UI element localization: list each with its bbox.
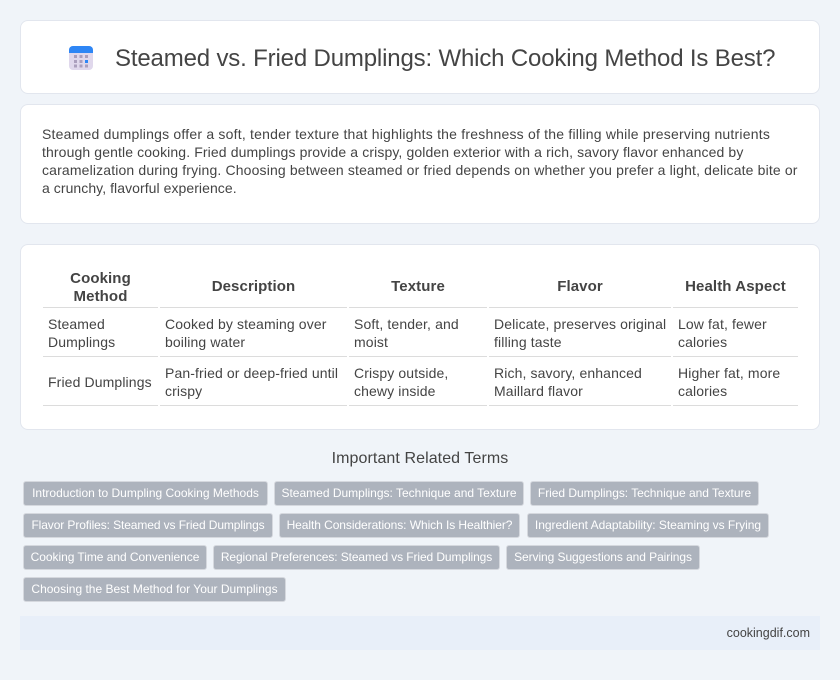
table row: steamed dumplings: Dumplings <box>48 334 115 350</box>
intro paragraph <box>42 126 798 196</box>
tag: Fried Dumplings: Technique and Texture <box>538 486 751 500</box>
tag: Steamed Dumplings: Technique and Texture <box>281 486 517 500</box>
table row: steamed dumplings: Delicate, preserves original <box>494 316 666 332</box>
icon: calendar grid <box>69 46 93 70</box>
table row: steamed dumplings: boiling water <box>165 334 245 350</box>
footer site name: cookingdif.com <box>727 626 810 640</box>
tag <box>274 481 524 506</box>
intro paragraph: Steamed dumplings offer a soft, tender texture that highlights the freshness of the filling while preserving nutrients <box>42 126 770 142</box>
table row: fried dumplings: Rich, savory, enhanced <box>494 365 642 381</box>
related terms heading: Important Related Terms <box>332 450 508 467</box>
table row: steamed dumplings: moist <box>354 334 388 350</box>
tag: Health Considerations: Which Is Healthier? <box>287 518 512 532</box>
table row: steamed dumplings: Cooked by steaming over <box>165 316 327 332</box>
table header: Description <box>212 278 295 295</box>
tag: Introduction to Dumpling Cooking Methods <box>32 486 259 500</box>
table header: Cooking <box>70 270 131 287</box>
header panel <box>20 20 820 94</box>
tag <box>23 513 273 538</box>
tag <box>23 545 207 570</box>
table header: Texture <box>391 278 445 295</box>
table row: fried dumplings: Crispy outside, <box>354 365 448 381</box>
tag: Ingredient Adaptability: Steaming vs Frying <box>535 518 761 532</box>
tag: Regional Preferences: Steamed vs Fried Dumplings <box>221 550 492 564</box>
tag <box>23 481 268 506</box>
intro paragraph: through gentle cooking. Fried dumplings provide a crispy, golden exterior with a rich, savory flavor enhanced by <box>42 144 743 160</box>
table header: Flavor <box>557 278 603 295</box>
table row: fried dumplings: Fried Dumplings <box>48 374 152 390</box>
intro paragraph: a crunchy, flavorful experience. <box>42 180 237 196</box>
table header <box>70 270 786 305</box>
tag <box>530 481 759 506</box>
table row: steamed dumplings <box>43 307 798 350</box>
tag <box>506 545 700 570</box>
title: Steamed vs. Fried Dumplings: Which Cooking Method Is Best? <box>115 45 775 72</box>
table row: fried dumplings: chewy inside <box>354 383 436 399</box>
intro text panel <box>20 104 820 224</box>
tag <box>23 577 286 602</box>
tag: Flavor Profiles: Steamed vs Fried Dumplings <box>31 518 265 532</box>
table row: fried dumplings: Maillard flavor <box>494 383 583 399</box>
intro paragraph: caramelization during frying. Choosing between steamed or fried depends on whether you prefer a light, delicate bite or <box>42 162 798 178</box>
table row: steamed dumplings: Low fat, fewer <box>678 316 767 332</box>
tag: Choosing the Best Method for Your Dumplings <box>31 582 278 596</box>
table row: steamed dumplings: filling taste <box>494 334 562 350</box>
tag <box>213 545 500 570</box>
footer bar <box>20 616 820 650</box>
tag <box>527 513 769 538</box>
table row: fried dumplings: crispy <box>165 383 202 399</box>
comparison table panel <box>20 244 820 430</box>
tag: Serving Suggestions and Pairings <box>514 550 692 564</box>
table row: fried dumplings: Pan-fried or deep-fried until <box>165 365 338 381</box>
table header: Health Aspect <box>685 278 786 295</box>
tag <box>279 513 520 538</box>
table header: Method <box>74 288 127 305</box>
table row: fried dumplings: Higher fat, more <box>678 365 780 381</box>
table row: fried dumplings <box>43 356 798 406</box>
related terms tags <box>23 481 769 602</box>
table row: fried dumplings: calories <box>678 383 727 399</box>
table row: steamed dumplings: calories <box>678 334 727 350</box>
table row: steamed dumplings: Soft, tender, and <box>354 316 459 332</box>
tag: Cooking Time and Convenience <box>31 550 199 564</box>
table row: steamed dumplings: Steamed <box>48 316 105 332</box>
